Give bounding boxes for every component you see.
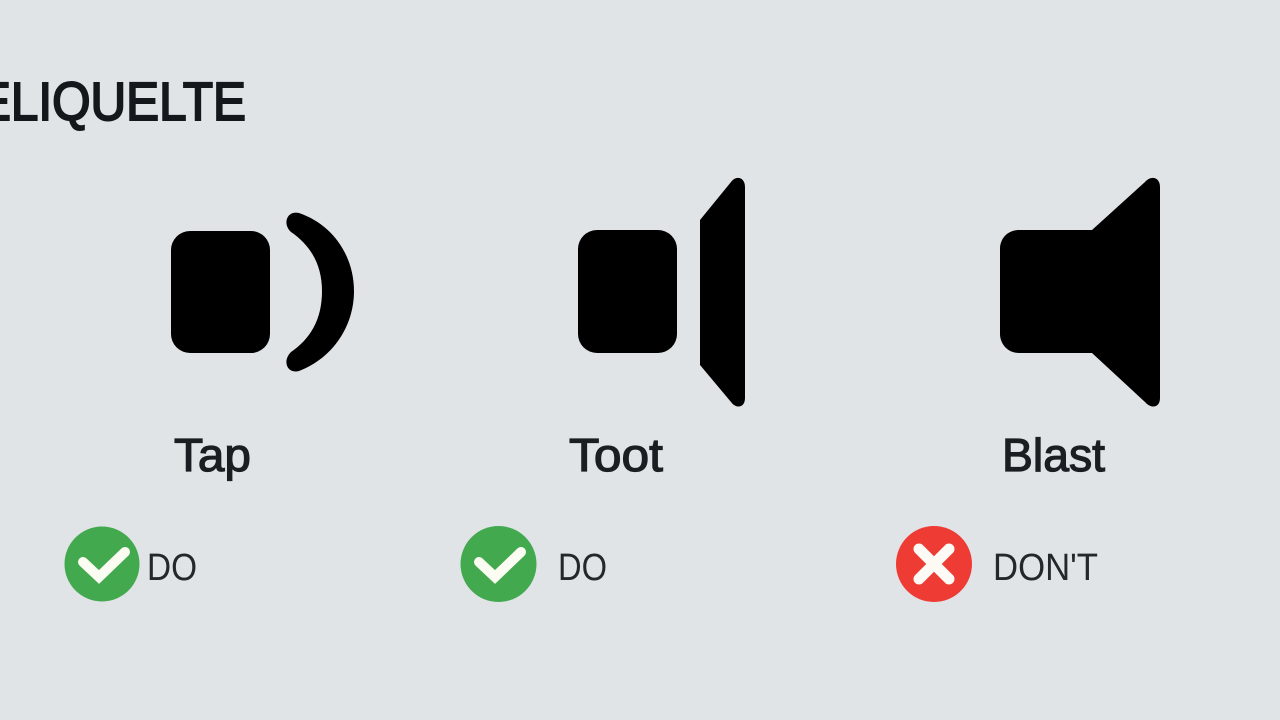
icon: blast horn, loud sound — [1000, 178, 1160, 407]
icon: tap horn, small sound — [171, 213, 354, 371]
label: Toot: Toot — [569, 429, 663, 481]
column: Tap — [64, 213, 354, 602]
icon: toot horn, medium sound — [578, 178, 745, 407]
column: Blast — [896, 178, 1160, 602]
badge: do — [460, 526, 536, 602]
badge: don't — [896, 526, 972, 602]
label: DO: DO — [147, 547, 197, 589]
label: DON'T: DON'T — [993, 547, 1098, 589]
column: Toot — [460, 178, 745, 602]
label: Tap: Tap — [174, 429, 251, 481]
label: Blast: Blast — [1002, 429, 1105, 481]
badge: do — [64, 526, 140, 602]
label: DO: DO — [558, 547, 607, 589]
